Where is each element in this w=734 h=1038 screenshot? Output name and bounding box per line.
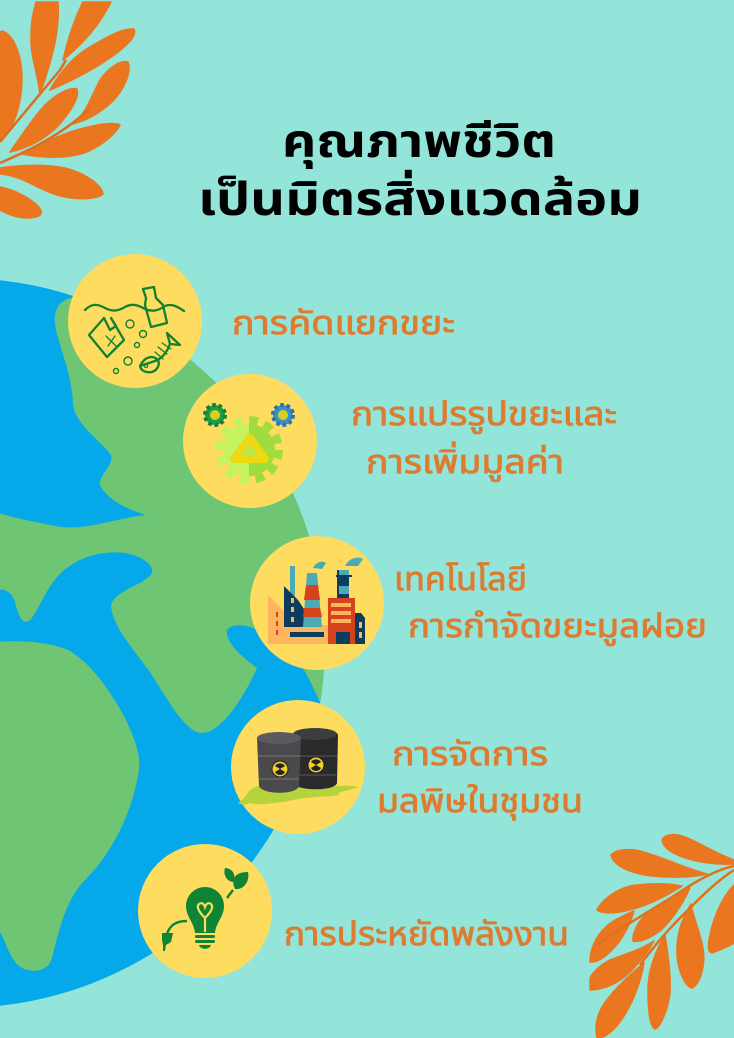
title: เป็นมิตรสิ่งแวดล้อม [198, 170, 642, 225]
badge: recycling gears icon [183, 374, 317, 508]
decoration: bottom-right orange leaves [590, 835, 734, 1038]
label [351, 395, 617, 482]
title [198, 115, 642, 225]
globe illustration [0, 270, 340, 1015]
label: มลพิษในชุมชน [377, 782, 583, 821]
label: การจัดการ [392, 735, 548, 772]
item 5: energy saving [138, 844, 569, 978]
label [377, 735, 583, 821]
title: คุณภาพชีวิต [282, 115, 556, 169]
label: การประหยัดพลังงาน [284, 915, 569, 952]
label: การเพิ่มมูลค่า [366, 441, 564, 482]
item 1: waste sorting [68, 254, 455, 388]
decoration: top-left orange leaves [0, 2, 135, 218]
label: การกำจัดขยะมูลฝอย [408, 607, 707, 646]
badge: light bulb icon [138, 844, 272, 978]
label: เทคโนโลยี [394, 560, 527, 597]
label: การคัดแยกขยะ [232, 304, 455, 341]
label [394, 560, 707, 646]
badge: ocean waste icon [68, 254, 202, 388]
label: การแปรรูปขยะและ [351, 395, 617, 434]
item 2: recycling and adding value [183, 374, 617, 508]
item 4: community pollution management [231, 700, 583, 834]
badge: toxic barrels icon [231, 700, 365, 834]
item 3: waste disposal technology [250, 536, 707, 670]
badge: factory icon [250, 536, 384, 670]
